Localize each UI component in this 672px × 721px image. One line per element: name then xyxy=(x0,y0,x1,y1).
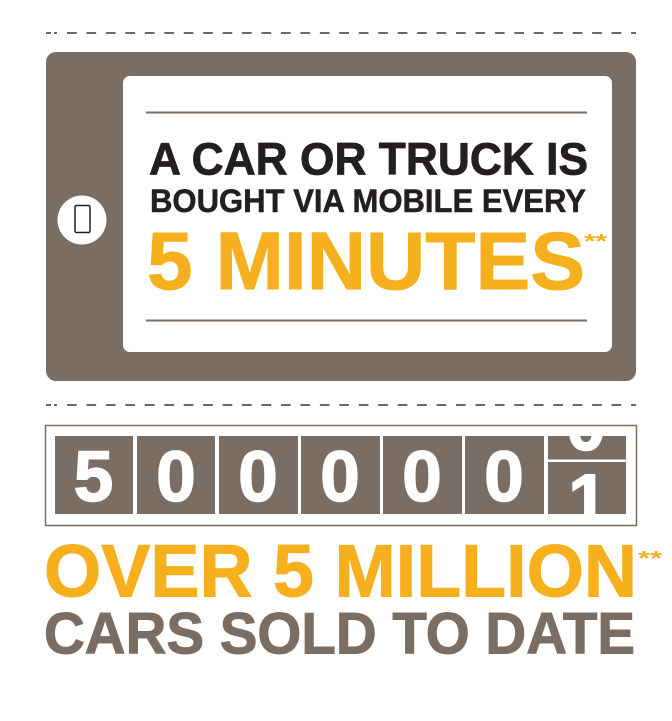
digit 0: 0 xyxy=(402,438,442,517)
footnote marks: ** xyxy=(638,548,662,570)
text: cars sold to date: CARS SOLD TO DATE xyxy=(44,602,635,667)
digit 0: 0 xyxy=(484,438,524,517)
footnote marks: ** xyxy=(584,231,607,253)
text: bought via mobile every: BOUGHT VIA MOBILE EVERY xyxy=(150,183,586,219)
rolling digit xyxy=(548,436,626,514)
digit 0 xyxy=(219,436,298,517)
phone screen xyxy=(123,76,612,352)
digit 0 xyxy=(137,436,215,517)
stat: 5 minutes: 5 MINUTES xyxy=(147,216,585,307)
digit 0 xyxy=(465,436,544,517)
icon: home button xyxy=(58,196,106,244)
heading: a car or truck is: A CAR OR TRUCK IS xyxy=(149,134,588,185)
digit 0: 0 xyxy=(156,438,196,517)
digit 0 xyxy=(301,436,380,517)
digit 0: 0 xyxy=(320,438,360,517)
panel: phone xyxy=(46,52,636,381)
odometer frame xyxy=(46,426,636,526)
digit 0 xyxy=(383,436,462,517)
rolling digit: 1 xyxy=(568,461,608,540)
phone body xyxy=(46,52,636,381)
digit 5: 5 xyxy=(74,438,113,517)
odometer counter xyxy=(44,424,638,526)
digit 0: 0 xyxy=(238,438,278,517)
infographic canvas xyxy=(44,32,662,654)
rolling digit: 0 xyxy=(566,387,606,466)
stat: over 5 million: OVER 5 MILLION xyxy=(44,529,637,612)
digit 5 xyxy=(55,436,133,517)
